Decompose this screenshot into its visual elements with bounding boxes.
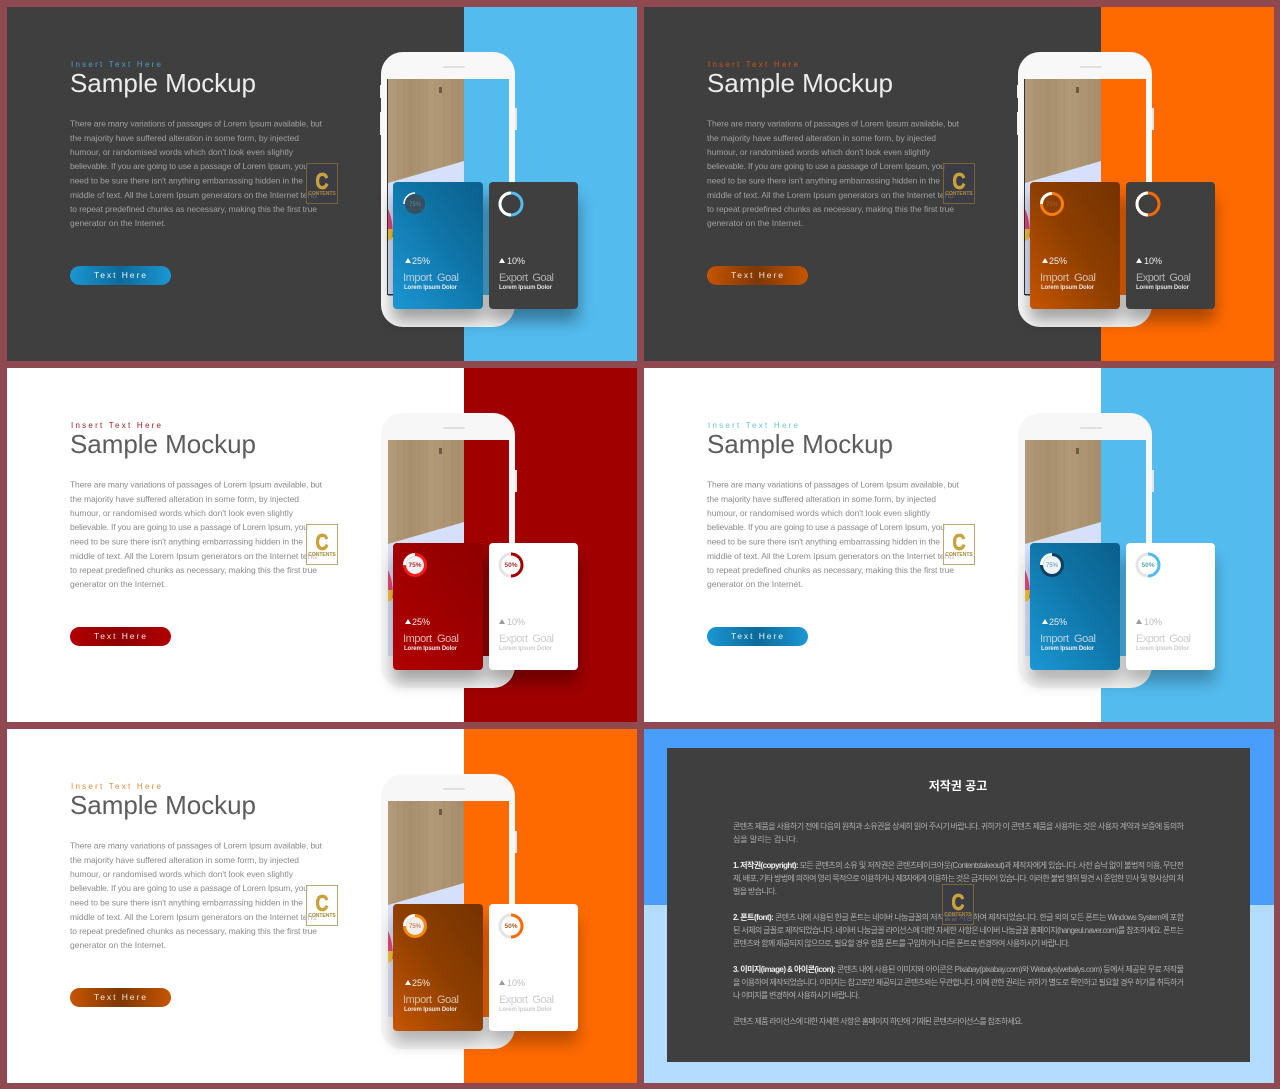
watermark logo: C [952, 529, 966, 555]
card: export goal: 10% [507, 617, 525, 627]
button [70, 988, 171, 1007]
card: import goal: Lorem Ipsum Dolor [1041, 646, 1095, 652]
donut chart: 50% [504, 562, 518, 569]
body text: need to be sure there isn't anything embarrassing hidden in the [70, 898, 303, 908]
card: import goal: 25% [412, 978, 430, 988]
body text: to repeat predefined chunks as necessary, making this the first true [70, 204, 317, 214]
copyright body text: 3. 이미지(image) & 아이콘(icon): 콘텐츠 내에 사용된 이미지와 아이콘은 Pixabay(pixabay.com)와 Webalys(webalys.com) 등에서 제공된 무료 저작물 [733, 964, 1184, 974]
phone mockup [381, 774, 517, 1049]
body text: generator on the Internet. [70, 218, 166, 228]
copyright body text: 콘텐츠 제품 라이선스에 대한 자세한 사항은 홈페이지 하단에 기재된 콘텐츠라이선스를 참조하세요. [733, 1016, 1023, 1026]
body text: generator on the Internet. [707, 218, 803, 228]
body text: the majority have suffered alteration in some form, by injected [707, 133, 936, 143]
donut chart: 75% [1046, 563, 1059, 569]
body text: generator on the Internet. [70, 940, 166, 950]
card: export goal: Export Goal [1136, 272, 1191, 284]
body text: There are many variations of passages of Lorem Ipsum available, but [70, 118, 323, 128]
copyright body text [733, 821, 1185, 1026]
body text: humour, or randomised words which don't look even slightly [707, 508, 931, 518]
body text: believable. If you are going to use a passage of Lorem Ipsum, you [70, 522, 308, 532]
button: Text Here [731, 631, 783, 641]
copyright body text: 된 서체의 글꼴로 제작되었습니다. 네이버 나눔글꼴 라이선스에 대한 자세한 사항은 네이버 나눔글꼴 홈페이지(hangeul.naver.com)를 참조하세요. 폰트는 [733, 925, 1184, 935]
watermark logo: C [316, 168, 328, 194]
panel: dark slide with orange accent [644, 7, 1274, 361]
panel: white slide with blue accent [644, 368, 1274, 722]
body text: believable. If you are going to use a passage of Lorem Ipsum, you [70, 161, 308, 171]
copyright body text: 2. 폰트(font): 콘텐츠 내에 사용된 한글 폰트는 네이버 나눔글꼴의 저작물을 사용하여 제작되었습니다. 한글 외의 모든 폰트는 Windows System에 포함 [733, 912, 1185, 922]
panel: dark slide with blue accent [7, 7, 637, 361]
watermark logo: CONTENTS [945, 552, 973, 558]
phone mockup [381, 413, 517, 688]
watermark logo [306, 524, 338, 564]
copyright body text: 콘텐츠와 함께 제공되지 않으므로, 필요할 경우 정품 폰트를 구입하거나 다른 폰트로 변경하여 사용하시기 바랍니다. [733, 938, 1070, 948]
card: export goal: 10% [1144, 617, 1162, 627]
body text: humour, or randomised words which don't look even slightly [707, 147, 931, 157]
card: import goal [393, 904, 483, 1031]
watermark logo: C [952, 889, 964, 915]
eyebrow label: Insert Text Here [708, 60, 799, 69]
body text [70, 480, 323, 589]
body text: need to be sure there isn't anything embarrassing hidden in the [70, 536, 303, 546]
body text: humour, or randomised words which don't look even slightly [70, 508, 294, 518]
button: Text Here [94, 270, 146, 280]
donut chart [500, 193, 522, 215]
body text: generator on the Internet. [707, 579, 803, 589]
card: export goal [489, 543, 578, 670]
body text: the majority have suffered alteration in some form, by injected [70, 855, 299, 865]
card: import goal [393, 182, 483, 309]
eyebrow label: Insert Text Here [708, 421, 799, 430]
body text: There are many variations of passages of Lorem Ipsum available, but [707, 118, 960, 128]
card: import goal: Lorem Ipsum Dolor [1041, 285, 1095, 291]
card: export goal: Lorem Ipsum Dolor [499, 285, 553, 291]
body text: need to be sure there isn't anything embarrassing hidden in the [70, 176, 303, 186]
donut chart: 75% [409, 202, 422, 208]
card: import goal: 25% [1049, 256, 1067, 266]
body text: There are many variations of passages of Lorem Ipsum available, but [70, 840, 323, 850]
phone mockup [1017, 52, 1154, 327]
copyright body text: 을 이용하여 제작되었습니다. 이미지는 참고로만 제공되고 콘텐츠와는 무관합니다. 이에 관한 권리는 귀하가 별도로 확인하고 필요할 경우 허가를 취득하거 [733, 977, 1184, 987]
copyright body text: 나 이미지를 변경하여 사용하시기 바랍니다. [733, 990, 860, 1000]
watermark logo [942, 884, 974, 924]
body text: generator on the Internet. [70, 579, 166, 589]
body text: to repeat predefined chunks as necessary, making this the first true [707, 204, 954, 214]
copyright body text: 벌을 받습니다. [733, 886, 777, 896]
card: export goal: 10% [1144, 256, 1162, 266]
copyright title: 저작권 공고 [929, 778, 987, 793]
body text: There are many variations of passages of Lorem Ipsum available, but [70, 480, 323, 490]
copyright body text: 콘텐츠 제품을 사용하기 전에 다음의 원칙과 소유권을 상세히 읽어 주시기 바랍니다. 귀하가 이 콘텐츠 제품을 사용하는 것은 사용자 계약과 보증에 동의하 [733, 821, 1185, 831]
watermark logo: C [952, 168, 966, 194]
card: import goal: Import Goal [403, 994, 459, 1006]
body text: believable. If you are going to use a passage of Lorem Ipsum, you [707, 522, 945, 532]
watermark logo: C [316, 890, 328, 916]
body text: to repeat predefined chunks as necessary, making this the first true [70, 565, 317, 575]
card: import goal: Import Goal [1040, 272, 1096, 284]
donut chart: 75% [1046, 202, 1059, 208]
card: export goal: 10% [507, 256, 525, 266]
body text [70, 840, 323, 950]
button [70, 266, 171, 285]
watermark logo [944, 164, 974, 204]
card: import goal: Lorem Ipsum Dolor [404, 1007, 458, 1013]
watermark logo [944, 524, 974, 564]
card: import goal [1030, 182, 1120, 309]
watermark logo [306, 886, 338, 926]
card: export goal: Export Goal [499, 994, 554, 1006]
body text: middle of text. All the Lorem Ipsum generators on the Internet tend [70, 912, 317, 922]
heading: Sample Mockup [707, 429, 893, 459]
body text: middle of text. All the Lorem Ipsum generators on the Internet tend [70, 551, 317, 561]
body text: to repeat predefined chunks as necessary, making this the first true [707, 565, 954, 575]
card: export goal [1126, 182, 1215, 309]
body text: humour, or randomised words which don't look even slightly [70, 869, 294, 879]
body text: There are many variations of passages of Lorem Ipsum available, but [707, 480, 960, 490]
card: export goal: 10% [507, 978, 525, 988]
card shadows [393, 558, 578, 682]
button [707, 627, 808, 646]
watermark logo: CONTENTS [944, 912, 972, 918]
body text: the majority have suffered alteration in some form, by injected [70, 494, 299, 504]
heading: Sample Mockup [70, 429, 256, 459]
heading: Sample Mockup [707, 68, 893, 98]
body text: middle of text. All the Lorem Ipsum generators on the Internet tend [70, 190, 317, 200]
body text [70, 118, 323, 228]
watermark logo: C [316, 529, 328, 555]
card: export goal: Lorem Ipsum Dolor [1136, 646, 1190, 652]
button [707, 266, 808, 285]
card shadows [1030, 197, 1215, 321]
body text: believable. If you are going to use a passage of Lorem Ipsum, you [707, 161, 945, 171]
card: import goal: Lorem Ipsum Dolor [404, 646, 458, 652]
button: Text Here [94, 631, 146, 641]
eyebrow label: Insert Text Here [71, 782, 162, 791]
copyright body text: 심을 알리는 겁니다. [733, 834, 798, 844]
card: export goal: Export Goal [499, 633, 554, 645]
body text: believable. If you are going to use a passage of Lorem Ipsum, you [70, 883, 308, 893]
card: export goal [1126, 543, 1215, 670]
watermark logo [306, 164, 338, 204]
card: import goal: Import Goal [403, 272, 459, 284]
card: export goal: Lorem Ipsum Dolor [1136, 285, 1190, 291]
card: import goal: 25% [1049, 617, 1067, 627]
eyebrow label: Insert Text Here [71, 60, 162, 69]
body text: the majority have suffered alteration in some form, by injected [70, 133, 299, 143]
body text: middle of text. All the Lorem Ipsum generators on the Internet tend [707, 551, 954, 561]
copyright body text: 1. 저작권(copyright): 모든 콘텐츠의 소유 및 저작권은 콘텐츠테이크아웃(Contentstakeout)과 제작자에게 있습니다. 사전 승낙 없이 불법적 이용, 무단전 [733, 860, 1184, 870]
donut chart: 75% [409, 924, 422, 930]
panel: white slide with red accent [7, 368, 637, 722]
card shadows [1030, 558, 1215, 682]
card: export goal [489, 904, 578, 1031]
card: export goal: Lorem Ipsum Dolor [499, 646, 553, 652]
body text: need to be sure there isn't anything embarrassing hidden in the [707, 536, 940, 546]
eyebrow label: Insert Text Here [71, 421, 162, 430]
panel: copyright notice slide [644, 729, 1274, 1083]
body text: to repeat predefined chunks as necessary, making this the first true [70, 926, 317, 936]
heading: Sample Mockup [70, 68, 256, 98]
button: Text Here [731, 270, 783, 280]
phone mockup [380, 52, 517, 327]
panel: white slide with orange accent [7, 729, 637, 1083]
donut chart [1137, 193, 1159, 215]
body text [707, 118, 960, 228]
button: Text Here [94, 992, 146, 1002]
body text [707, 480, 960, 589]
donut chart: 50% [504, 923, 518, 930]
heading: Sample Mockup [70, 790, 256, 820]
donut chart: 50% [1141, 562, 1155, 569]
body text: middle of text. All the Lorem Ipsum generators on the Internet tend [707, 190, 954, 200]
card: export goal: Lorem Ipsum Dolor [499, 1007, 553, 1013]
card shadows [393, 919, 578, 1043]
body text: the majority have suffered alteration in some form, by injected [707, 494, 936, 504]
card: export goal: Export Goal [1136, 633, 1191, 645]
watermark logo: CONTENTS [945, 191, 973, 197]
body text: humour, or randomised words which don't look even slightly [70, 147, 294, 157]
card: import goal: Import Goal [403, 633, 459, 645]
card shadows [393, 197, 578, 321]
card: import goal [1030, 543, 1120, 670]
donut chart: 75% [408, 562, 422, 569]
phone mockup [1018, 413, 1154, 688]
card: import goal [393, 543, 483, 670]
card: export goal [489, 182, 578, 309]
card: import goal: Lorem Ipsum Dolor [404, 285, 458, 291]
watermark logo: CONTENTS [308, 913, 336, 919]
button [70, 627, 171, 646]
card: import goal: Import Goal [1040, 633, 1096, 645]
watermark logo: CONTENTS [308, 191, 336, 197]
card: import goal: 25% [412, 256, 430, 266]
card: export goal: Export Goal [499, 272, 554, 284]
body text: need to be sure there isn't anything embarrassing hidden in the [707, 176, 940, 186]
copyright body text: 재, 배포, 기타 방법에 의하여 영리 목적으로 이용하거나 제3자에게 이용하는 것은 금지되어 있습니다. 이러한 불법 행위 발견 시 준엄한 민사 및 형사상의 처 [733, 873, 1184, 883]
watermark logo: CONTENTS [308, 552, 336, 558]
card: import goal: 25% [412, 617, 430, 627]
